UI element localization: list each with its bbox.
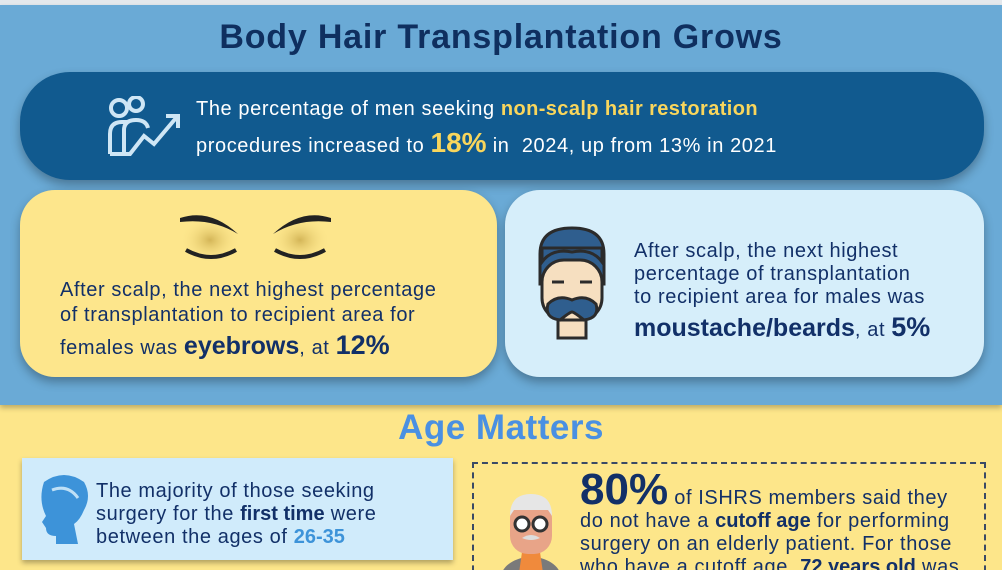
text: first time age: The majority of those seeking [96, 480, 375, 502]
text: non-scalp stat: procedures increased to 18% in 2024, up from 13% in 2021 [196, 127, 777, 158]
text: moustache stat [634, 240, 930, 342]
text: non-scalp stat [196, 98, 777, 158]
text: first time age: between the ages of 26-35 [96, 526, 345, 548]
icon: eyes [180, 215, 331, 259]
panel: non-scalp stat [20, 72, 984, 180]
text: first time age [96, 480, 376, 548]
panel: cutoff age [472, 462, 986, 570]
text: moustache stat: percentage of transplantation [634, 263, 910, 285]
text: eyebrows stat: After scalp, the next highest percentage [60, 279, 436, 301]
panel: first time age [22, 458, 453, 560]
text: cutoff stat: 80% of ISHRS members said they [580, 465, 948, 514]
panel: eyebrows [20, 190, 497, 377]
text: eyebrows stat [60, 279, 436, 360]
title: Body Hair Transplantation Grows [219, 18, 783, 56]
icon: head profile [41, 475, 88, 544]
text: moustache stat: to recipient area for males was [634, 286, 925, 308]
text: cutoff stat [580, 465, 959, 570]
text: eyebrows stat: of transplantation to recipient area for [60, 304, 415, 326]
text: eyebrows stat: females was eyebrows, at 12% [60, 330, 390, 360]
panel: moustache [505, 190, 984, 377]
icon: bearded man [538, 226, 606, 340]
text: first time age: surgery for the first time were [96, 503, 376, 525]
text: moustache stat: After scalp, the next highest [634, 240, 898, 262]
text: cutoff stat: surgery on an elderly patient. For those [580, 533, 952, 555]
panel: body hair section [0, 5, 1002, 405]
heading: Age Matters: Age Matters [398, 408, 604, 447]
icon: elderly man [503, 494, 559, 570]
text: non-scalp stat: The percentage of men seeking non-scalp hair restoration [196, 98, 758, 120]
text: cutoff stat: do not have a cutoff age for performing [580, 510, 950, 532]
text: moustache stat: moustache/beards, at 5% [634, 312, 930, 342]
icon: people growth [108, 96, 180, 156]
